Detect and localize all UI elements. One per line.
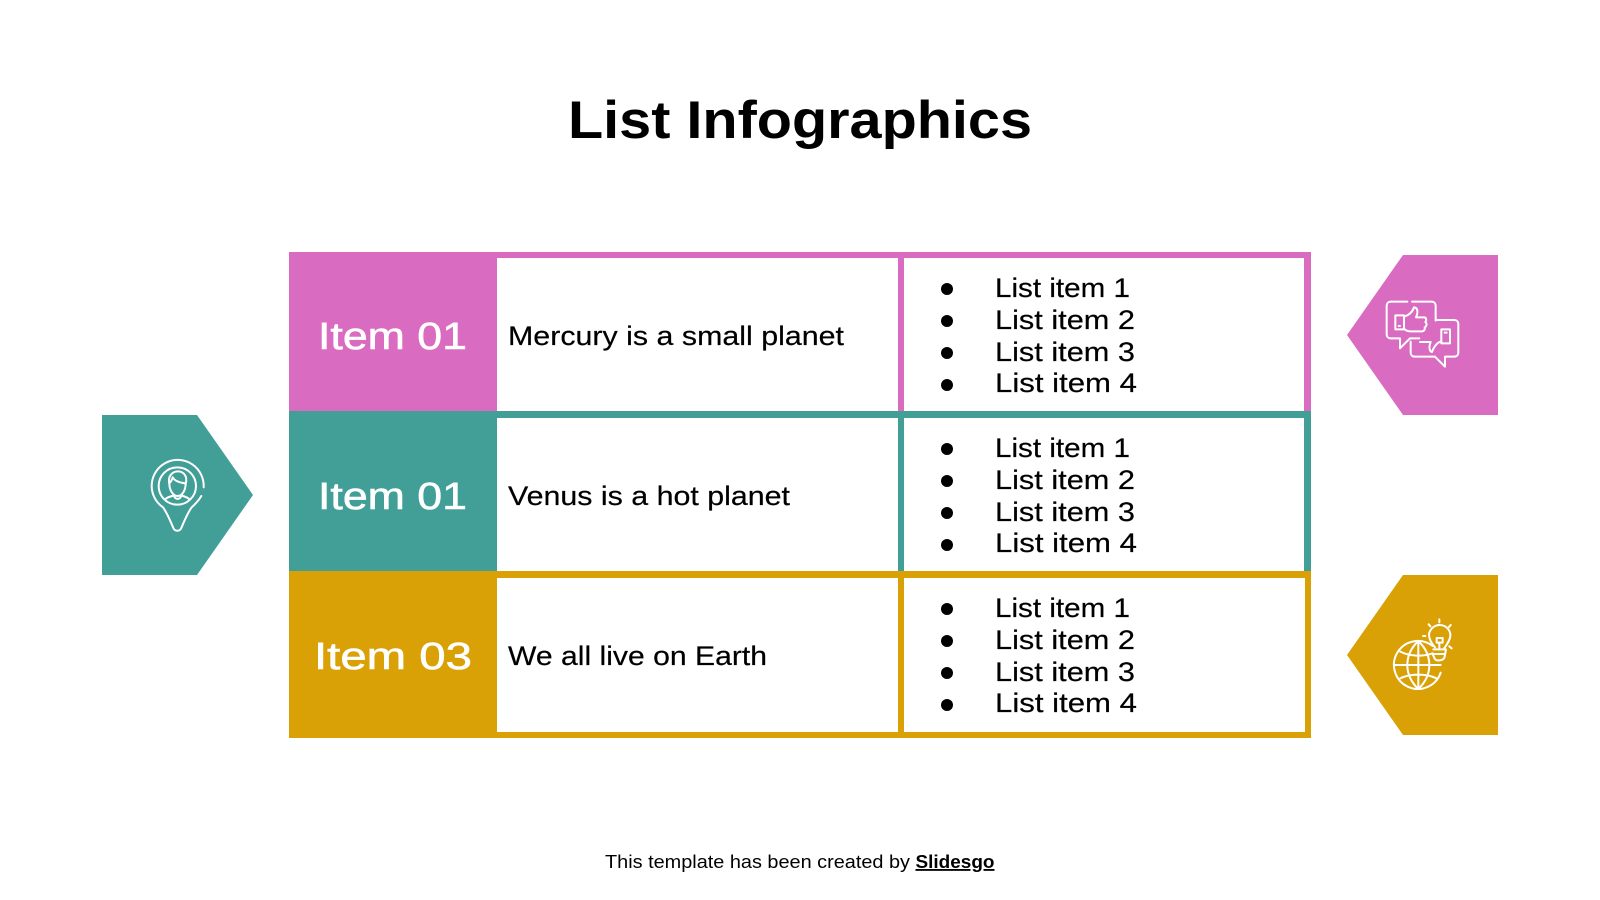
teal arrow badge with pin icon [102, 415, 253, 575]
row 3 list [941, 593, 1137, 718]
row 3 description: We all live on Earth [508, 641, 767, 671]
table row 3: Earth [289, 571, 1311, 738]
title: List Infographics [568, 91, 1032, 150]
icon: chat bubbles with thumbs [1387, 302, 1458, 367]
row 1 list [941, 273, 1137, 398]
row 2 list [941, 433, 1137, 558]
row 3 list: List item 3 [995, 657, 1135, 687]
row 2 list: List item 2 [995, 465, 1135, 495]
row 2 frame [497, 411, 1311, 571]
row 3 label cell: Item 03 [314, 636, 472, 678]
row 3 label cell [289, 571, 497, 738]
footer credit: This template has been created by [605, 851, 911, 872]
pink arrow badge with feedback icon [1347, 255, 1498, 415]
row 1 frame [497, 252, 1311, 411]
row 2 list: List item 4 [995, 528, 1137, 558]
row 2 list: List item 1 [995, 433, 1130, 463]
row 1 label cell [289, 252, 497, 411]
row 1 list: List item 2 [995, 305, 1135, 335]
row 3 list: List item 4 [995, 688, 1137, 718]
row 3 frame [497, 571, 1311, 738]
row 1 list: List item 1 [995, 273, 1130, 303]
row 1 description: Mercury is a small planet [508, 321, 845, 351]
gold arrow badge with globe and bulb icon [1347, 575, 1498, 735]
row 1 list: List item 4 [995, 368, 1137, 398]
row 3 list: List item 1 [995, 593, 1130, 623]
table row 2: Venus [289, 411, 1311, 571]
row 2 description: Venus is a hot planet [508, 481, 791, 511]
table row 1: Mercury [289, 252, 1311, 411]
row 2 label cell: Item 01 [318, 476, 467, 518]
row 3 list: List item 2 [995, 625, 1135, 655]
row 2 list: List item 3 [995, 497, 1135, 527]
footer credit: Slidesgo [916, 851, 994, 872]
row 1 label cell: Item 01 [318, 316, 467, 358]
row 1 list: List item 3 [995, 337, 1135, 367]
icon: globe with light bulb [1394, 619, 1452, 689]
row 2 label cell [289, 411, 497, 571]
icon: person location pin [152, 460, 204, 531]
